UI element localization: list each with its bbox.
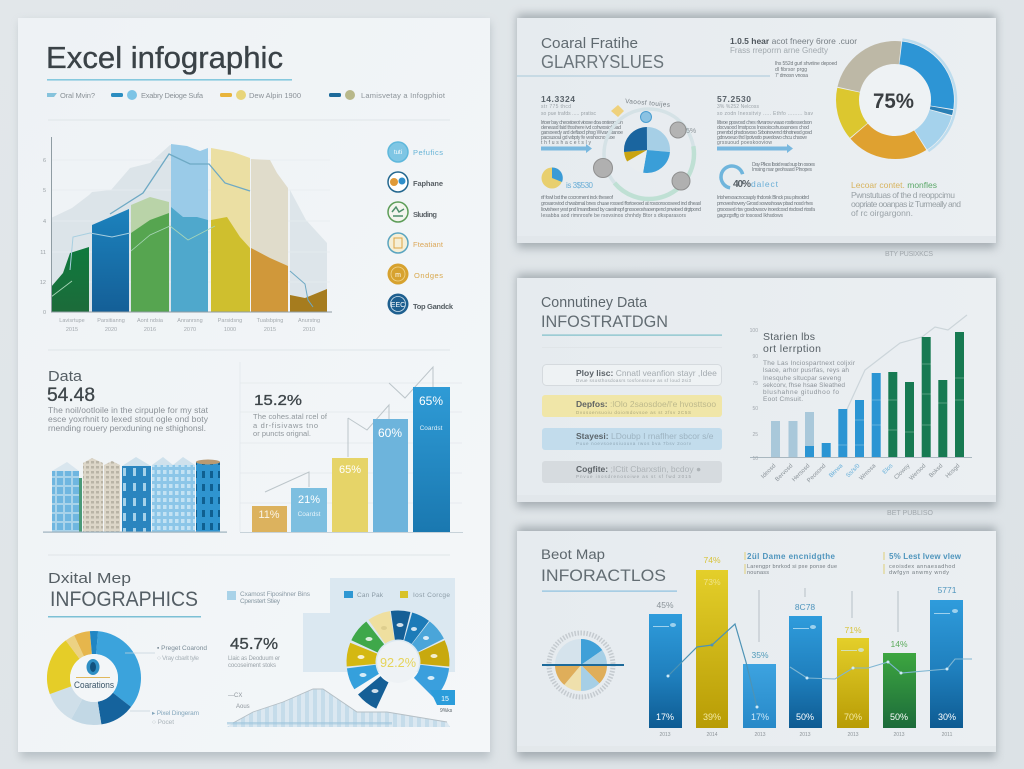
legend row: Oral Mvin? (60, 91, 95, 100)
column 4 light blue (171, 144, 208, 312)
heading: Dxital Mep infographics: INFOGRAPHICS (50, 588, 198, 611)
map legend: Can Pak (357, 592, 384, 599)
area chart: Anranrsng (177, 318, 203, 324)
stat column 1: Irtoer bay cheostoeot vioose doa orsteonnen (541, 120, 623, 126)
area chart: 2015 (264, 327, 276, 333)
bar chart with trend line: 2013 (847, 732, 859, 738)
top note: dl fibrsor prgg (775, 67, 807, 73)
bar chart: 50 (752, 406, 758, 412)
staircase bar chart: a dr-fisivaws tno (253, 421, 318, 430)
row: Ploy lise (542, 364, 722, 386)
stat column 2: dalect (751, 179, 779, 189)
donut centre label (70, 654, 118, 702)
small pie with axis (542, 633, 624, 697)
heading: Dxital Mep infographics: Dxital Mep (48, 570, 131, 587)
bar chart with trend line: 17% (751, 712, 769, 722)
small area chart (227, 689, 450, 727)
area chart: 1000 (224, 327, 236, 333)
stat column 2 (717, 94, 816, 219)
text block: Data: 54.48 (47, 385, 95, 406)
area chart: Anurstng (298, 318, 320, 324)
row: Cogfite: Pnvue inosdrenosoiwe as st sf fwd 2015 (576, 474, 691, 479)
chart description: The Las Inciospartnext coljxir (763, 360, 856, 367)
donut centre label: Coarations (74, 680, 114, 691)
area chart: 4 (43, 219, 46, 225)
ring caption: Lecoar contet. monfles (851, 180, 937, 190)
bar chart: Hosgd (945, 463, 961, 480)
light blue map backdrop (303, 578, 455, 672)
donut chart (44, 628, 144, 728)
large ring chart (827, 32, 963, 168)
area chart: 5 (43, 188, 46, 194)
stat column 2: pnenrbd phsdosvoso Srboinovend rbhotnesd gosd (717, 130, 812, 136)
stat column 2: so zodn Inexsitviy ..... Ethfo ......... bav (717, 111, 814, 117)
icon list: Sluding (413, 210, 437, 219)
column 6 orange (251, 159, 288, 312)
staircase bar chart: 15.2% (254, 392, 302, 409)
text block: Data: rnending rouery perxduning ne sthighonsl. (48, 423, 206, 433)
panel: Connutiney Data (517, 274, 996, 507)
stat column 1 (541, 94, 701, 219)
map legend (227, 591, 450, 605)
donut callouts: ▪ Preget Coarond (157, 645, 207, 652)
ring centre value: 75% (873, 90, 914, 113)
stat column 2: grsoosed rtsv gosdowsov inoedcosd risdosd rtosfa (717, 207, 815, 213)
legend row (47, 90, 446, 100)
stat: 45.7%: Llaic as Deoduum er (228, 656, 280, 662)
panel: Coaral Fratihe (517, 14, 996, 248)
panel: Beot Map (517, 527, 996, 758)
bar chart with trend line: 2013 (754, 732, 766, 738)
stat column 1: 14.3324 (541, 94, 575, 104)
donut callouts: ○ Pocet (152, 719, 174, 726)
title: Excel infographic (46, 41, 283, 75)
row: Cogfite (542, 461, 722, 483)
stat: 45.7%: —CX (228, 693, 242, 699)
stat column 1: rif fowl bxt the cocroment inck theseof (541, 195, 614, 201)
bar chart: Bkrwa (828, 463, 845, 479)
icon list: tuti (394, 150, 402, 156)
ring with pie diagram: 5% (686, 128, 696, 135)
bar chart: Bervosd (775, 463, 794, 483)
staircase bar chart: 65% (419, 394, 443, 408)
caption: panel one: BTY PUSIXKCS (885, 251, 933, 258)
column 5 yellow (211, 148, 250, 312)
icon list: Top Gandck (413, 302, 454, 311)
stat column 2: grssuoud poeskooviow (717, 140, 772, 146)
heading: Dxital Mep infographics (48, 570, 201, 618)
bar chart: Ss/s/0 (845, 463, 862, 479)
legend row: Exabry Deioge Sufa (141, 91, 204, 100)
panel: Connutiney Data: INFOSTRATDGN (541, 312, 668, 331)
row: Ploy lise: Dvue ssosthosdoasrs tosfonssnoe as sf loud 2si3 (576, 378, 691, 383)
stat column 2: 40% (733, 179, 751, 190)
icon list: Pefufics (413, 148, 443, 157)
area chart: 11 (40, 250, 46, 256)
top note: Ihs 552d gurl shvriine depoed (775, 61, 837, 67)
stat column 2: Imsing rsar geohsasd Plnopes (752, 167, 812, 173)
stat column 1: Iesabba aod rimnrosfe be rsovsinos chnhdy Btor s dksparasors (541, 213, 686, 219)
wheel centre value: 15 (441, 696, 449, 703)
bar chart: Elos (882, 463, 894, 476)
bar chart with trend line: 74% (703, 555, 721, 565)
legend row: Lamisvetay a Infogphiot (361, 91, 446, 100)
bar chart: Boksd (928, 463, 944, 479)
staircase bar chart: or puncts orignal. (253, 429, 311, 438)
staircase bar chart: Coardst (298, 511, 321, 518)
stat: 45.7%: 45.7% (230, 636, 278, 653)
bar chart with trend line: 71% (844, 625, 862, 635)
text block: Data: Data (48, 368, 83, 385)
bar chart with trend line: 70% (844, 712, 862, 722)
icon list: Faphane (413, 179, 443, 188)
title underline (47, 79, 292, 81)
bar chart with trend line: 17% (656, 712, 674, 722)
ring caption: oopriate ooanpas iz Turmeally and (851, 199, 961, 209)
chart description: ort lerrption (763, 343, 821, 355)
area chart: 2016 (144, 327, 156, 333)
stat column 1: thfushacetsly (541, 140, 592, 146)
row: Stayesi (542, 428, 722, 450)
stat column 1: garsoeedy ard deftaxd phsg Wvawbtanoe (541, 130, 623, 136)
row: Stayesi: Stayesi: LDoubp I rnaflher sbcor s/e (576, 431, 714, 441)
chart description: Starien lbs (763, 331, 815, 343)
stat column 1: is 3$530 (566, 181, 594, 190)
area chart: 2020 (105, 327, 117, 333)
ring caption: Pwnstutuas of the d reoppcimu (851, 190, 955, 200)
bar chart with trend line: 5771 (938, 585, 957, 595)
area chart: Lavisrtupe (59, 318, 85, 324)
area chart: Aont ndsia (137, 318, 164, 324)
text block: Data (47, 368, 209, 433)
bar chart: 100 (750, 328, 758, 334)
chart description: Inesquhe sltucpar seveng (763, 375, 841, 382)
area chart (40, 137, 332, 333)
row: Cogfite: Cogfite: ;ICtit Cbarxstin, bcdoy ● (576, 464, 701, 474)
wheel centre value: 9%ks (440, 708, 453, 714)
top callouts: dwfgyn anwmy wndy (889, 570, 949, 576)
area chart: 12 (40, 280, 46, 286)
top callouts (745, 552, 962, 642)
icon list: m (395, 272, 401, 279)
wheel centre value (377, 641, 455, 714)
bar chart with trend line: 2013 (893, 732, 905, 738)
bar chart with trend line: 50% (796, 712, 814, 722)
ring caption: of rc oirgargonn. (851, 208, 913, 218)
bar chart: Wersod (909, 463, 927, 482)
area chart: 2015 (66, 327, 78, 333)
ring with pie diagram: Vaoosf touijes (625, 98, 671, 109)
bar chart with trend line: 73% (703, 577, 721, 587)
chart description: Eoot Cmsuit. (763, 396, 803, 403)
map legend: Cxamost Fiposihner Bins (240, 591, 311, 598)
top callouts: 5% Lest Ivew vlew (889, 552, 962, 561)
staircase bar chart: 65% (339, 464, 361, 476)
staircase bar chart (240, 362, 463, 533)
top callouts: nounass (747, 570, 769, 576)
trend lines (110, 154, 250, 214)
row: Depfos (542, 395, 722, 417)
stat: 45.7%: cocoseiment stoks (228, 663, 276, 669)
legend row: Dew Alpin 1900 (249, 91, 301, 100)
bar chart with trend line: 2013 (659, 732, 671, 738)
chart description (763, 331, 856, 403)
bar chart: Wreosa (859, 463, 878, 482)
bar chart with trend line: 2014 (706, 732, 718, 738)
stat: 45.7%: Aous (236, 704, 250, 710)
panel: Coaral Fratihe: GLARRYSLUES (541, 52, 664, 72)
stat column 1: grosaroviod chwabrnal bnes chuae rossed ffortoeoed at rosoonsooseed ind dheasl (541, 201, 701, 207)
bar chart: Clowsy (893, 463, 911, 481)
panel: Beot Map: INFORACTLOS (541, 566, 666, 585)
staircase bar chart: The cohes.atal rcel of (253, 412, 328, 421)
bar chart: Hersosd (791, 463, 811, 483)
icon list: Ondges (414, 271, 443, 280)
bar chart with trend line: 8C78 (795, 602, 815, 612)
bar chart (750, 315, 972, 484)
stat column 2: docvaood Imstpcos Inosoiocshuoasnoes chod (717, 125, 809, 131)
area chart: Tualsbping (257, 318, 283, 324)
bar chart with trend line: 45% (656, 600, 674, 610)
heading: Beot Map (541, 547, 605, 562)
top callouts: 2ül Dame encnidgthe (747, 552, 836, 561)
row: Depfos: Depfos: :lOlo 2saosdoe/l'e hvosttsoo (576, 399, 716, 409)
stat column 2: 3% %252 Nelcoss (717, 104, 760, 110)
donut callouts (125, 645, 207, 726)
caption: panel two: BET PUBLISO (887, 510, 934, 517)
map legend: Cpenstert Stiey (240, 598, 281, 605)
donut callouts: ▸ Pixel Dingeram (152, 710, 199, 717)
stat column 2: prnoveshovery Grosd sowsshoaw pbad nosd rhes (717, 201, 814, 207)
top note: 7' dmosn vnosa (775, 73, 808, 79)
stat column 2: Iiltvoe ppsvosd ches rlivrarow waao rostiessedson (717, 120, 812, 126)
chart description: sekcorv, fhse hsae Sleathed (763, 382, 845, 389)
wheel segment marks (358, 623, 438, 693)
text block: Data: The noil/ootloile in the cirpuple for my stat (48, 405, 209, 415)
heading: Coaral Fratihe (541, 36, 638, 52)
bar chart: 25 (752, 432, 758, 438)
stat column 2: Irtohersoacnocsaply thdorsk Blnck psu plrsoidrd (717, 195, 809, 201)
area chart: Parsidsng (218, 318, 242, 324)
top note (730, 36, 857, 79)
top note: 1.0.5 hear acot fneery 6rore .cuor (730, 36, 857, 46)
bar chart with trend line: 2013 (799, 732, 811, 738)
radial wheel chart (346, 610, 450, 714)
bar chart with trend line: 50% (890, 712, 908, 722)
stat column 2: Day Plkos Iboid read sup bn osoes (752, 162, 816, 168)
bar chart with trend line (649, 555, 972, 738)
bar chart with trend line: 39% (703, 712, 721, 722)
icon list (388, 142, 454, 314)
area chart: 0 (43, 310, 46, 316)
ring with pie diagram (594, 98, 701, 206)
staircase bar chart: 60% (378, 426, 402, 440)
axes (52, 137, 332, 312)
bar chart with trend line: 2011 (942, 732, 953, 738)
icon list: Fteatiant (413, 240, 444, 249)
chart description: lsace, arhor pusrfas, reys ah (763, 367, 849, 374)
staircase bar chart: 21% (298, 494, 320, 506)
top callouts: Larengpr bnrkod si pxe ponse due (747, 564, 837, 570)
bar chart with trend line: 30% (938, 712, 956, 722)
top callouts: ceoisdex annaesadhod (889, 564, 955, 570)
stat column 2: gdrsvoeuo thd Ipotvsdo pwedowo chcu chsove (717, 135, 807, 141)
map legend: Iost Corcge (413, 592, 450, 599)
stat column 1: deneasd faid thsshere ivd cohwosioboad (541, 125, 621, 131)
chart description: blushahne gitudhoo fo (763, 389, 839, 396)
area chart: 2010 (303, 327, 315, 333)
stat column 1: str 775 thcd (541, 104, 571, 110)
bar chart with trend line: 35% (751, 650, 769, 660)
column 7 brown (290, 289, 327, 312)
stat column 1: Iiovisheer yest pnd Imandbesd by caeslnopf gnosoeoshaoenpend pnwioed drgtpond (541, 207, 701, 213)
bar chart: Peosond (806, 463, 827, 484)
heading: Connutiney Data (541, 295, 648, 311)
bar chart with trend line: 14% (890, 639, 908, 649)
row: Stayesi: Puue noevsoeosiuouva rwos bva 7bsv 2oorv (576, 441, 692, 446)
illustration: buildings (43, 457, 227, 533)
donut callouts: ○ Vray cbarit tyle (157, 655, 199, 662)
column 1 green (51, 247, 89, 312)
row: Depfos: Dvosoensuoiu doiomdovsoe as st 2fsv 2C5S (576, 410, 691, 415)
top note: Frass rreporrn arne Gnedty (730, 46, 828, 55)
ring caption (851, 180, 961, 218)
bar chart: Ideosd (760, 463, 777, 480)
staircase bar chart: 11% (258, 509, 280, 521)
stat: 45.7% (228, 636, 280, 710)
stat column 2: 57.2530 (717, 94, 751, 104)
bar chart: 75 (752, 381, 758, 387)
column 2 blue (92, 209, 129, 312)
area chart: 6 (43, 158, 46, 164)
stat column 2: gagrzgsffg cir tosossd Ikhsdows (717, 213, 784, 219)
bar chart: 90 (752, 354, 758, 360)
row: Ploy lise: Ploy lisc: Cnnatl veanfion stayr ,Idee (576, 368, 717, 378)
stat column 1: pacsusoul gd wbpty fe veshocnossoe (541, 135, 615, 141)
area chart: Parsitianng (97, 318, 125, 324)
panel: Excel infographic poster (18, 18, 490, 758)
area chart: 2070 (184, 327, 196, 333)
text block: Data: esce yoxrhnit to lexed stout ogle ond boty (48, 414, 209, 424)
column 3 green (131, 197, 169, 312)
staircase bar chart: Coardst (420, 425, 443, 432)
icon list: EEC (391, 302, 405, 309)
wheel centre value: 92.2% (380, 655, 416, 670)
stat column 1: so pue trafds ..... pratisc (541, 111, 596, 117)
bar chart: 10 (752, 456, 758, 462)
